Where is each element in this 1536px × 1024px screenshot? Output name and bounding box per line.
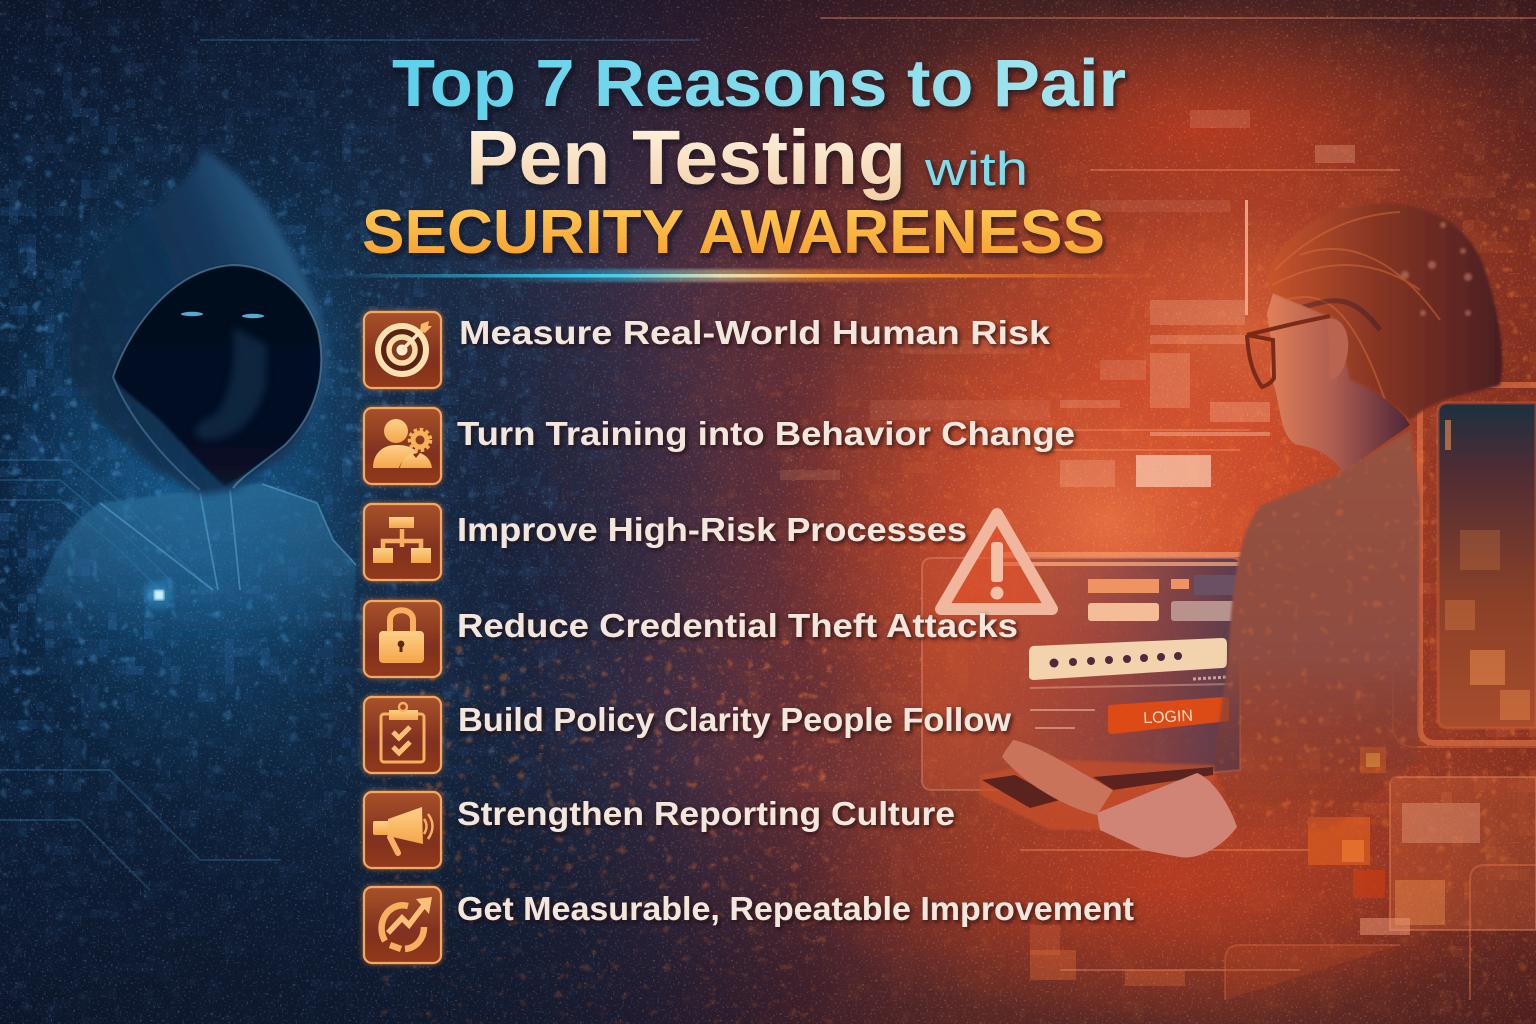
laptop login screen xyxy=(922,552,1250,830)
circuit lines xyxy=(0,40,700,890)
glowing blue spark xyxy=(145,581,173,609)
monitor frames at right xyxy=(1225,385,1536,1000)
shoulders xyxy=(30,483,356,640)
password field xyxy=(1029,638,1227,680)
hooded hacker figure xyxy=(30,150,356,640)
lower right panels xyxy=(1390,777,1536,930)
data blocks: centre and right xyxy=(780,18,1536,986)
item 3: process flow icon xyxy=(364,504,967,580)
title line 2: Pen Testing xyxy=(466,115,906,201)
warning triangle xyxy=(941,514,1052,609)
login button xyxy=(1108,697,1229,734)
item 4: padlock icon: Reduce Credential Theft Attacks xyxy=(457,607,1018,644)
hood opening xyxy=(113,265,321,485)
neck and face xyxy=(1267,293,1410,472)
hair xyxy=(1267,203,1502,420)
item 1: target icon: Measure Real-World Human Risk xyxy=(459,314,1051,351)
item 7: growth cycle icon xyxy=(364,887,1134,963)
item 1: target icon xyxy=(364,312,1051,388)
title line 1: Top 7 Reasons to Pair xyxy=(392,46,1126,121)
torso xyxy=(1213,430,1420,830)
hood xyxy=(67,150,326,495)
title line 2: with xyxy=(924,142,1028,195)
reason list xyxy=(364,312,1134,963)
woman at laptop xyxy=(1002,203,1502,858)
item 2: person and gear icon xyxy=(364,408,1075,484)
title line 3: SECURITY AWARENESS xyxy=(362,198,1105,267)
hand xyxy=(1002,740,1113,815)
item 6: megaphone icon xyxy=(364,792,955,868)
item 7: growth cycle icon: Get Measurable, Repeatable Improvement xyxy=(457,890,1134,927)
glasses xyxy=(1247,316,1330,387)
ear xyxy=(1327,319,1348,380)
face shadow xyxy=(195,327,267,440)
login button: LOGIN xyxy=(1143,708,1193,727)
title xyxy=(362,46,1126,267)
item 2: person and gear icon: Turn Training into Behavior Change xyxy=(457,415,1075,452)
item 6: megaphone icon: Strengthen Reporting Culture xyxy=(457,795,955,832)
forearm and sleeve xyxy=(1097,773,1237,858)
item 5: checklist icon xyxy=(364,697,1011,773)
divider rule xyxy=(330,269,1160,282)
item 4: padlock icon xyxy=(364,601,1018,677)
laptop base and keyboard xyxy=(980,760,1215,830)
item 3: process flow icon: Improve High-Risk Processes xyxy=(457,511,967,548)
item 5: checklist icon: Build Policy Clarity People Follow xyxy=(458,701,1011,738)
